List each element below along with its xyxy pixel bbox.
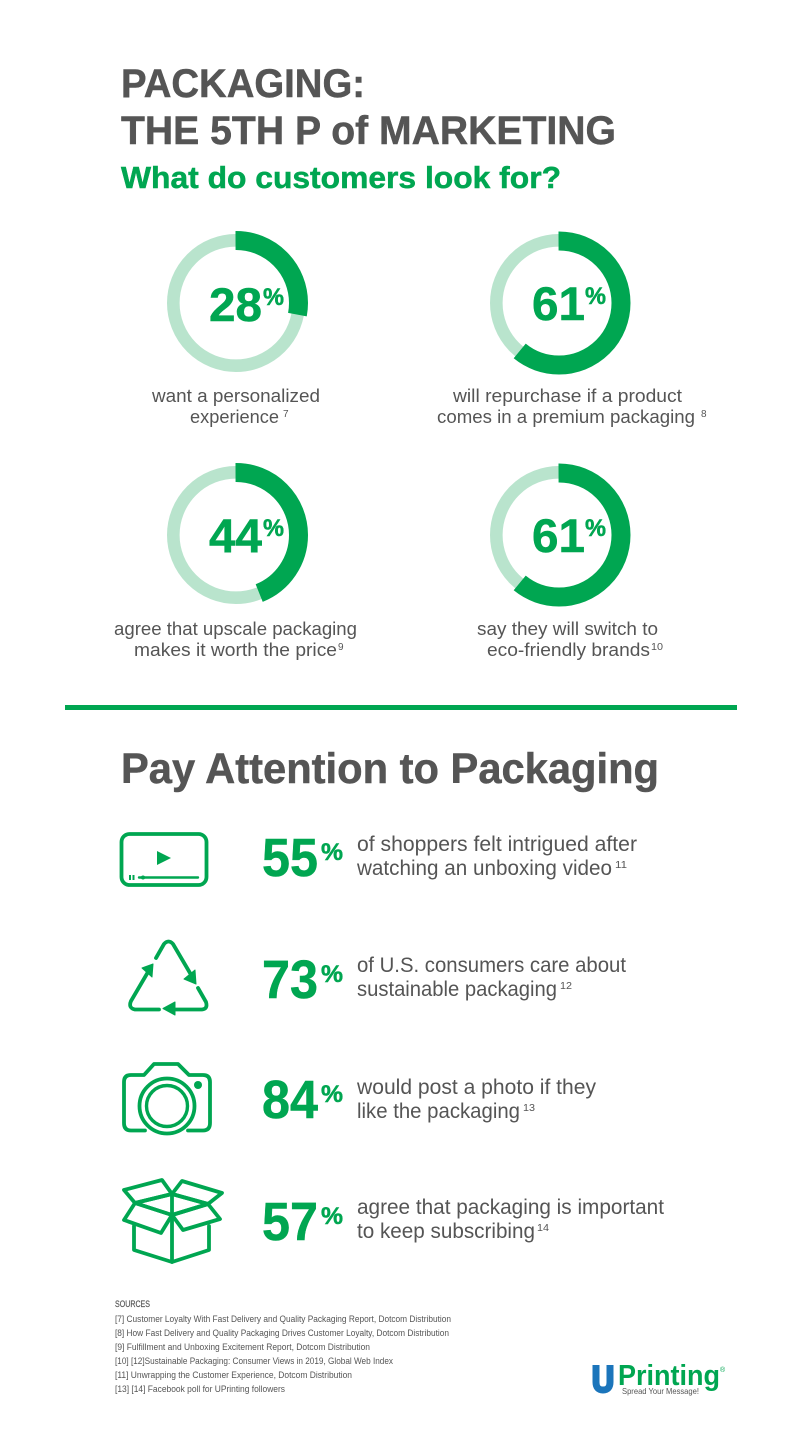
row: keep subscribing xyxy=(124,1180,664,1262)
label: upscale packaging: makes it worth the price xyxy=(134,639,337,660)
stat: 44% xyxy=(209,509,284,562)
stat: 57%: 57 xyxy=(262,1192,318,1252)
stat: 61%: % xyxy=(585,515,606,542)
stat: 57%: % xyxy=(321,1203,343,1230)
label: upscale packaging: 9 xyxy=(338,642,344,653)
text: unboxing video xyxy=(356,832,637,880)
logo: UPrinting: ® xyxy=(720,1366,726,1374)
icon: camera xyxy=(124,1064,210,1134)
heading: pay attention: Pay Attention to Packaging xyxy=(121,745,659,793)
stat: 55%: % xyxy=(321,839,343,866)
sources list xyxy=(115,1299,451,1394)
sources list: [7] Customer Loyalty With Fast Delivery and Quality Packaging Report, Dotcom Distribution xyxy=(115,1314,451,1324)
text: post a photo: 13 xyxy=(523,1103,535,1114)
label: personalized experience: experience xyxy=(190,406,279,427)
row: unboxing video xyxy=(122,828,637,888)
sources list: [8] How Fast Delivery and Quality Packaging Drives Customer Loyalty, Dotcom Distribution xyxy=(115,1328,449,1338)
panel: donut 28 percent xyxy=(151,240,320,427)
panel: donut 61 percent eco-friendly xyxy=(477,472,663,660)
donut chart: 61% xyxy=(496,240,622,366)
sources list: [11] Unwrapping the Customer Experience, Dotcom Distribution xyxy=(115,1370,352,1380)
title: THE 5TH P of MARKETING xyxy=(121,109,616,153)
icon: open box xyxy=(124,1180,222,1262)
stat: 55%: 55 xyxy=(262,828,318,888)
text: post a photo xyxy=(356,1075,596,1123)
label: eco-friendly brands: say they will switch to xyxy=(477,618,658,639)
text: unboxing video: of shoppers felt intrigued after xyxy=(357,832,637,856)
text: post a photo: like the packaging xyxy=(357,1099,520,1123)
label: upscale packaging xyxy=(114,618,357,660)
label: premium packaging: 8 xyxy=(701,409,707,420)
subtitle: What do customers look for? xyxy=(121,160,561,195)
label: premium packaging: comes in a premium packaging xyxy=(437,406,695,427)
stat: 44%: 44 xyxy=(209,509,262,562)
stat: 73%: % xyxy=(321,961,343,988)
stat: 84%: % xyxy=(321,1081,343,1108)
text: post a photo: would post a photo if they xyxy=(356,1075,596,1099)
title xyxy=(121,62,616,153)
title: PACKAGING: xyxy=(121,62,365,106)
stat: 28%: % xyxy=(263,284,284,311)
panel: donut 61 percent repurchase xyxy=(437,240,707,427)
text: unboxing video: 11 xyxy=(615,860,627,871)
stat: 28% xyxy=(209,278,284,331)
stat: 28%: 28 xyxy=(209,278,262,331)
stat: 61%: 61 xyxy=(532,277,585,330)
sources list: [9] Fulfillment and Unboxing Excitement Report, Dotcom Distribution xyxy=(115,1342,370,1352)
sources list: [13] [14] Facebook poll for UPrinting followers xyxy=(115,1384,286,1394)
sources list: [10] [12]Sustainable Packaging: Consumer Views in 2019, Global Web Index xyxy=(115,1356,394,1366)
row: post a photo xyxy=(124,1064,596,1134)
icon: video player xyxy=(122,834,206,885)
label: eco-friendly brands xyxy=(477,618,663,660)
text: sustainable packaging: 12 xyxy=(560,981,572,992)
stat: 61%: % xyxy=(585,283,606,310)
label: personalized experience xyxy=(151,385,320,427)
text: unboxing video: watching an unboxing video xyxy=(356,856,612,880)
stat: 61%: 61 xyxy=(532,509,585,562)
label: personalized experience: 7 xyxy=(283,409,289,420)
text: sustainable packaging: of U.S. consumers care about xyxy=(357,953,626,977)
logo: UPrinting: Printing xyxy=(618,1360,720,1392)
label: upscale packaging: agree that upscale packaging xyxy=(114,618,357,639)
label: premium packaging: will repurchase if a product xyxy=(452,385,682,406)
icon: recycle triangle xyxy=(130,942,206,1015)
label: eco-friendly brands: eco-friendly brands xyxy=(487,639,650,660)
donut chart: 28% xyxy=(173,240,299,366)
donut chart: 44% xyxy=(173,472,299,598)
label: personalized experience: want a personalized xyxy=(151,385,320,406)
text: keep subscribing: to keep subscribing xyxy=(357,1219,535,1243)
text: keep subscribing xyxy=(357,1195,664,1243)
donut chart: 61% xyxy=(496,472,622,598)
sources list: SOURCES xyxy=(115,1299,150,1309)
text: keep subscribing: 14 xyxy=(537,1223,549,1234)
text: keep subscribing: agree that packaging is important xyxy=(357,1195,664,1219)
text: sustainable packaging xyxy=(357,953,626,1001)
stat: 73%: 73 xyxy=(262,950,318,1010)
logo: UPrinting: Spread Your Message! xyxy=(622,1386,699,1396)
label: premium packaging xyxy=(437,385,707,427)
text: sustainable packaging: sustainable packaging xyxy=(357,977,557,1001)
panel: donut 44 percent xyxy=(114,472,357,660)
stat: 44%: % xyxy=(263,515,284,542)
stat: 84%: 84 xyxy=(262,1070,318,1130)
row: sustainable packaging xyxy=(130,942,626,1015)
label: eco-friendly brands: 10 xyxy=(651,642,663,653)
